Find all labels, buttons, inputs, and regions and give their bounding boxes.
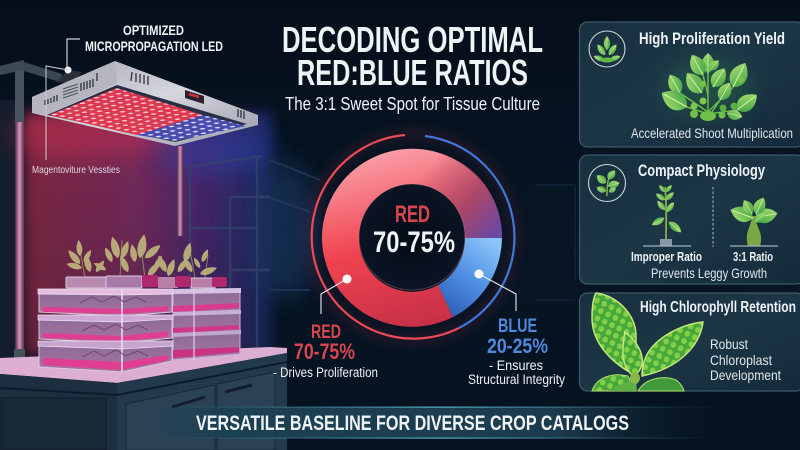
light glow under lamp — [0, 100, 315, 370]
blue segment — [438, 238, 502, 317]
red callout: - Drives Proliferation — [273, 365, 378, 380]
icon: sprout badge — [589, 31, 625, 67]
illustration: multiplying shoots — [657, 51, 762, 122]
title — [282, 19, 543, 93]
red LED array — [49, 88, 203, 135]
outer ring: blue — [425, 136, 514, 328]
callout: optimized micropropagation LED: MICROPROPAGATION LED — [85, 38, 223, 54]
bottom banner — [160, 406, 720, 439]
panel: compact physiology: 3:1 Ratio — [733, 249, 773, 264]
illustration: leggy plant — [643, 184, 691, 246]
red callout: 70-75% — [294, 339, 355, 364]
illustration: chloroplast leaf — [592, 293, 703, 391]
donut center label — [373, 201, 455, 259]
panel: high chlorophyll retention — [580, 293, 800, 391]
red segment — [322, 149, 502, 327]
icon: plant badge — [588, 164, 626, 202]
lamp display — [185, 90, 204, 104]
divider — [712, 187, 714, 247]
title: RED:BLUE RATIOS — [297, 52, 528, 93]
panel: high chlorophyll retention: Development — [710, 367, 781, 383]
donut center label: RED — [395, 201, 430, 228]
red to purple transition — [412, 148, 502, 238]
callout: optimized micropropagation LED — [64, 22, 223, 74]
vessels: back stack — [173, 288, 241, 360]
outer ring: red — [312, 135, 459, 339]
lamp stand — [0, 60, 183, 364]
panel: high chlorophyll retention: Robust — [710, 336, 748, 352]
callout: vessel label — [32, 66, 120, 176]
callout: optimized micropropagation LED: OPTIMIZED — [123, 22, 184, 38]
blue callout — [468, 270, 565, 387]
donut chart — [309, 134, 515, 340]
subtitle: The 3:1 Sweet Spot for Tissue Culture — [285, 94, 540, 114]
LED grow lamp — [32, 61, 258, 146]
blue callout: - Ensures — [489, 357, 543, 373]
background shelves — [188, 156, 575, 350]
title: DECODING OPTIMAL — [282, 19, 543, 60]
tissue culture plants — [66, 234, 218, 278]
small top jars — [66, 275, 227, 288]
panel: compact physiology: Prevents Leggy Growth — [651, 265, 767, 281]
blue callout: BLUE — [498, 315, 537, 337]
panel: high proliferation yield — [580, 22, 800, 147]
callout: vessel label: Magentoviture Vessties — [32, 165, 120, 176]
donut center label: 70-75% — [373, 226, 455, 259]
blue callout: Structural Integrity — [468, 371, 565, 387]
red callout: RED — [311, 321, 341, 343]
red callout — [273, 274, 378, 380]
bottom banner: VERSATILE BASELINE FOR DIVERSE CROP CATALOGS — [196, 412, 629, 435]
panel: compact physiology: Improper Ratio — [631, 249, 702, 264]
lab counter — [0, 347, 287, 450]
illustration: compact plant — [728, 195, 779, 246]
panel: high chlorophyll retention: Chloroplast — [710, 352, 772, 368]
vessels: front stack — [38, 289, 173, 372]
blue LED array — [137, 115, 246, 141]
blue callout: 20-25% — [487, 335, 548, 358]
panel: compact physiology — [580, 155, 800, 284]
